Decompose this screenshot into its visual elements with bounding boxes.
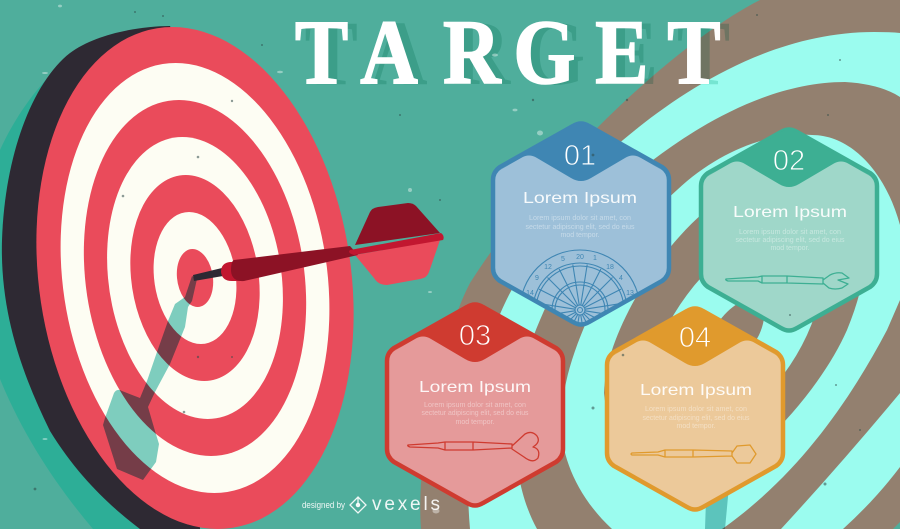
target side wall [2,26,200,529]
title shadow: TARGET [305,2,730,104]
light speckles [42,5,543,513]
icon: vexels diamond [350,497,366,513]
panel 03: Lorem ipsum dolor sit amet, con [424,402,526,409]
panel 01: Lorem Ipsum [523,190,637,207]
icon: dartboard: 5 [561,256,565,263]
panel 03: Lorem Ipsum [419,379,531,396]
panel 03: sectetur adipiscing elit, sed do eius [422,410,529,417]
panel 04: sectetur adipiscing elit, sed do eius [642,415,750,422]
panel 02 [701,130,877,330]
icon: dartboard: 20 [576,254,584,261]
background dart shadow [705,486,729,529]
dart shadow on target [103,276,197,480]
icon: dartboard: 9 [535,275,539,282]
panel 04: Lorem ipsum dolor sit amet, con [645,406,747,413]
panel 01: sectetur adipiscing elit, sed do eius [525,224,635,231]
panel 02: 02 [773,145,805,177]
dart [193,203,444,285]
panel 04 [607,308,783,510]
icon: dart with hexagon flight [631,445,756,463]
target cast shadow [0,33,200,529]
panel 03: 03 [459,320,491,352]
credit: designed by vexels: designed by [302,500,345,510]
title: TARGET [295,1,721,103]
icon: dartboard: 1 [593,255,597,262]
icon: dartboard: 13 [626,290,634,297]
icon: dart with claw flight [726,273,849,289]
panel 02: Lorem ipsum dolor sit amet, con [739,229,841,236]
panel 04: Lorem Ipsum [640,382,752,399]
panel 03 [387,304,563,506]
panel 04: 04 [679,322,711,354]
panel 02: mod tempor. [770,245,810,252]
panel 01: 01 [564,140,596,172]
icon: dart with heart flight [408,432,539,461]
panel 01 [490,121,672,327]
credit: designed by vexels: vexels [372,494,440,515]
panel 01: Lorem ipsum dolor sit amet, con [529,215,631,222]
icon: dartboard [522,250,638,322]
panel 04: mod tempor. [676,423,716,430]
icon: dartboard: 12 [544,264,552,271]
icon: dartboard: 4 [619,275,623,282]
panel 02: Lorem Ipsum [733,204,847,221]
credit: designed by vexels [302,494,440,515]
panel 02: sectetur adipiscing elit, sed do eius [735,237,845,244]
panel 01: mod tempor. [560,232,600,239]
panel 03: mod tempor. [456,419,495,426]
icon: dartboard: 18 [606,264,614,271]
target face rings [15,27,375,529]
icon: dartboard: 14 [526,290,534,297]
background large target rings [420,0,900,529]
